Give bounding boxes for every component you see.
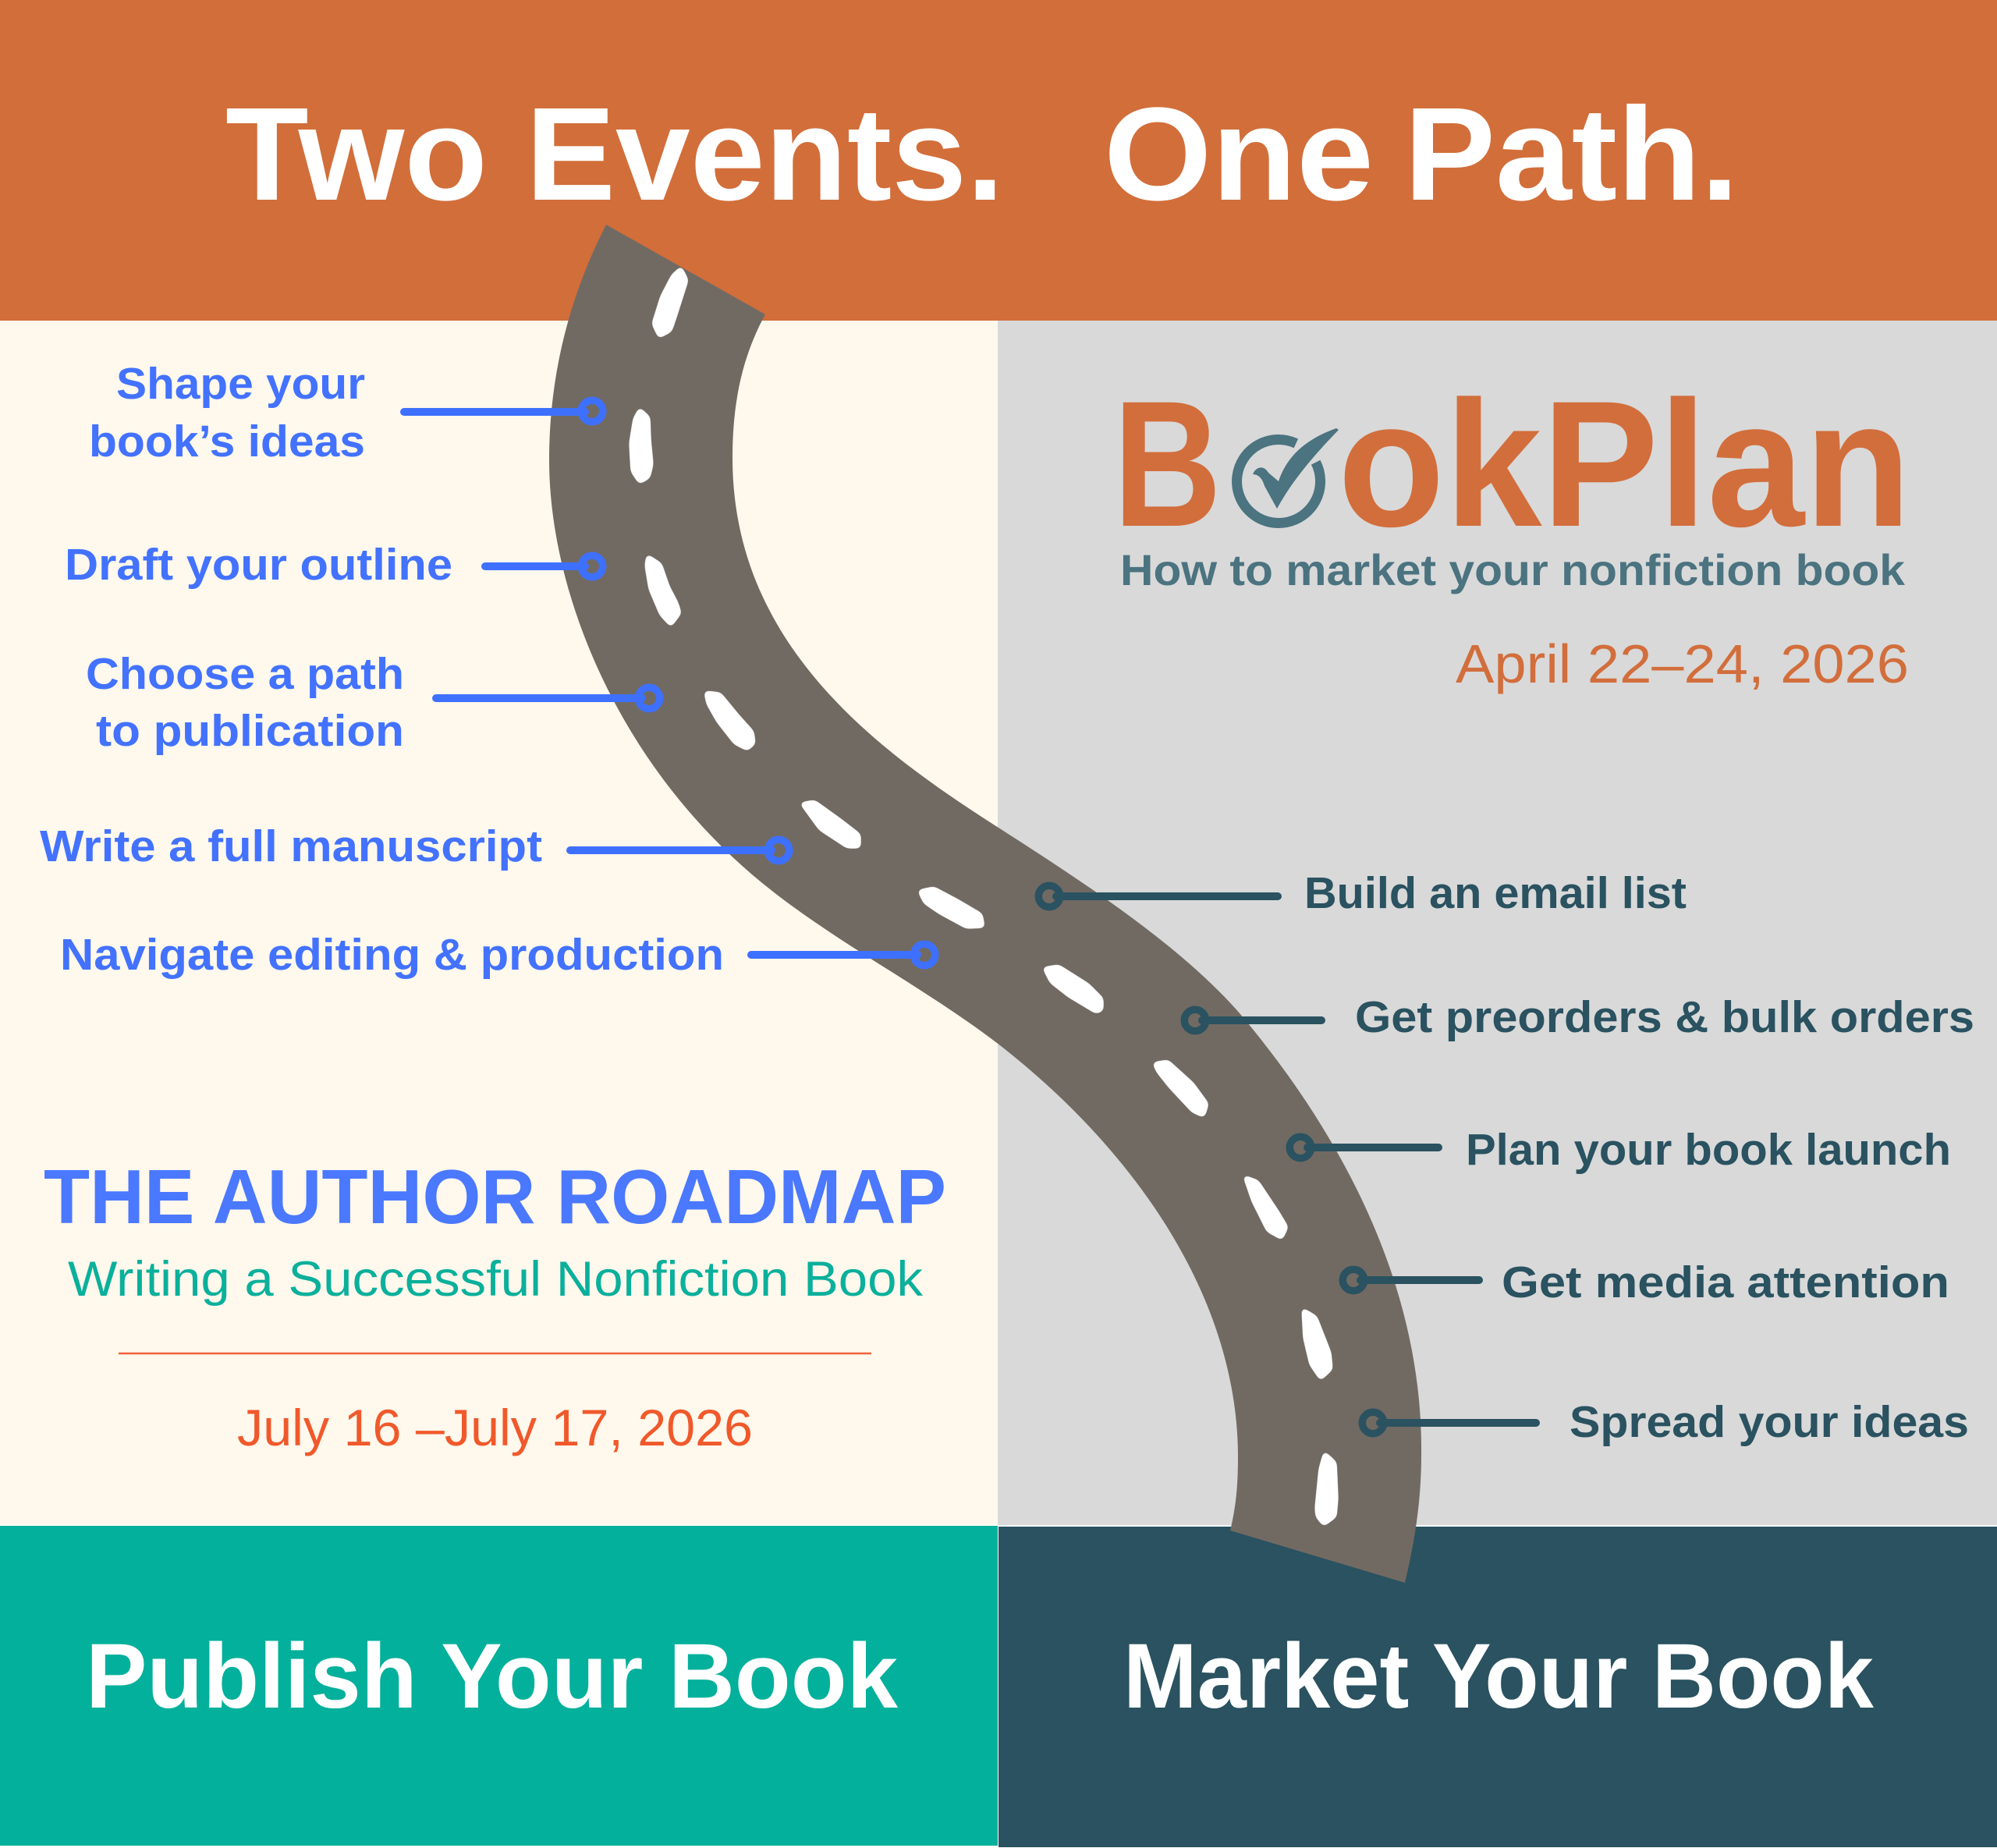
event block: author roadmap (44, 1154, 946, 1456)
milestone: get preorders and bulk orders: Get preorders & bulk orders (1355, 992, 1974, 1042)
panel: left background (0, 321, 998, 1525)
milestone: plan your book launch: Plan your book launch (1466, 1125, 1951, 1175)
milestone: choose a path to publication (86, 649, 660, 756)
milestone: get media attention (1343, 1257, 1949, 1307)
logo: bookplan wordmark: B (1113, 364, 1222, 564)
tagline: How to market your nonfiction book (1120, 545, 1906, 594)
milestone: get media attention: Get media attention (1502, 1257, 1949, 1307)
milestone: shape your book's ideas (89, 359, 603, 466)
milestone: shape your book's ideas: book’s ideas (89, 417, 365, 466)
footer heading: market your book: Market Your Book (1123, 1625, 1874, 1728)
date: april: April 22–24, 2026 (1456, 633, 1909, 694)
right milestones (1038, 868, 1974, 1447)
footer band: publish (0, 1526, 998, 1846)
left milestones (40, 359, 935, 980)
header band (0, 0, 1997, 321)
footer band: market (998, 1527, 1997, 1847)
milestone: shape your book's ideas: Shape your (116, 359, 365, 409)
milestone: choose a path to publication: to publication (96, 706, 404, 756)
footer heading: publish your book: Publish Your Book (86, 1625, 898, 1728)
title: Events. (526, 80, 1004, 229)
date: july: July 16 –July 17, 2026 (237, 1399, 753, 1456)
logo: bookplan wordmark: okPlan (1338, 364, 1911, 564)
subheading: Writing a Successful Nonfiction Book (68, 1252, 924, 1307)
milestone: write a full manuscript (40, 821, 789, 871)
milestone: spread your ideas: Spread your ideas (1570, 1397, 1969, 1447)
milestone: build an email list (1038, 868, 1687, 918)
title (225, 80, 1739, 229)
milestone: choose a path to publication: Choose a path (86, 649, 404, 699)
milestone: build an email list: Build an email list (1304, 868, 1687, 918)
milestone: navigate editing and production: Navigate editing & production (60, 930, 724, 980)
milestone: draft your outline (65, 540, 603, 590)
road (549, 225, 1421, 1583)
title: One (1104, 80, 1374, 229)
panel: right background (998, 321, 1997, 1525)
heading: the author roadmap: THE AUTHOR ROADMAP (44, 1154, 946, 1240)
title: Two (225, 80, 488, 229)
event block: bookplan (1113, 364, 1911, 694)
milestone: write a full manuscript: Write a full manuscript (40, 821, 542, 871)
milestone: spread your ideas (1362, 1397, 1969, 1447)
milestone: draft your outline: Draft your outline (65, 540, 452, 590)
title: Path. (1404, 80, 1739, 229)
icon: check mark in circle (1237, 428, 1339, 523)
